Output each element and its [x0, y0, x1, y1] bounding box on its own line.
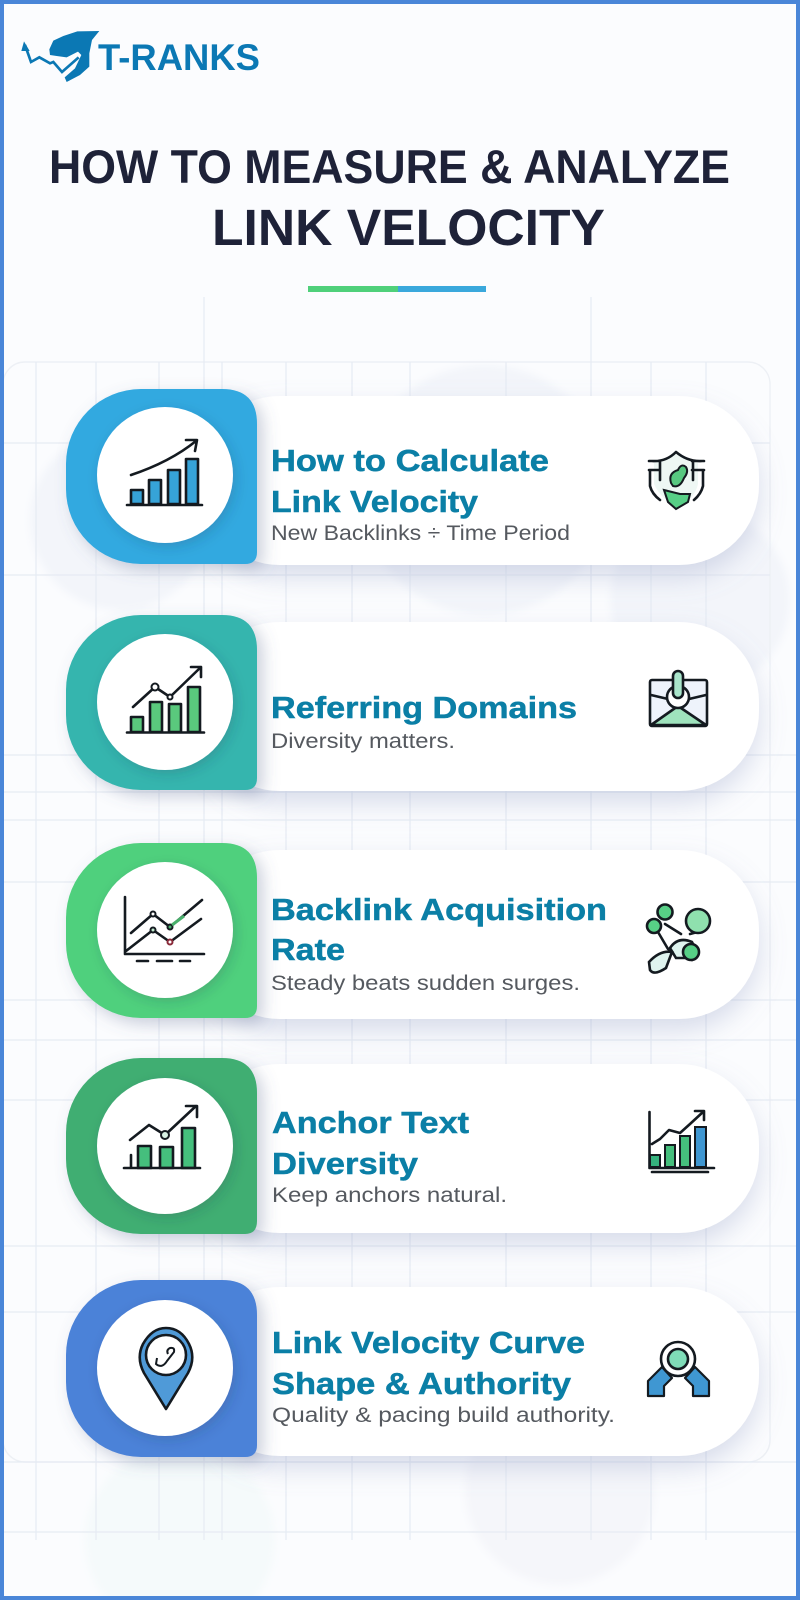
colour tile [66, 1280, 257, 1457]
icon: location pin [97, 1300, 233, 1436]
card [200, 622, 759, 791]
title: HOW TO MEASURE & ANALYZE [49, 140, 730, 193]
colour tile [66, 389, 257, 564]
icon: bars with arrow [97, 1078, 233, 1214]
panel: link velocity curve: Shape & Authority [272, 1366, 572, 1401]
icon: shield [649, 452, 704, 509]
logo wordmark: T-RANKS [98, 37, 260, 78]
title: LINK VELOCITY [212, 199, 605, 256]
panel: backlink acquisition rate: Rate [271, 932, 345, 967]
heading: How to Calculate [271, 443, 549, 478]
description: Keep anchors natural. [272, 1184, 507, 1207]
colour tile [66, 843, 257, 1018]
heading: Backlink Acquisition [271, 892, 607, 927]
icon: t-rex with zigzag arrow [21, 31, 99, 82]
panel: how to calculate: Link Velocity [271, 484, 479, 519]
icon: network molecule [647, 904, 710, 973]
description: New Backlinks ÷ Time Period [271, 522, 570, 545]
panel: link velocity curve [66, 1280, 759, 1457]
panel: how to calculate [66, 389, 759, 565]
panel: referring domains [66, 615, 759, 791]
description: Steady beats sudden surges. [271, 972, 580, 995]
description: Diversity matters. [271, 730, 455, 753]
card [200, 396, 759, 565]
icon: magnifier with arrows [648, 1342, 709, 1396]
card [200, 1287, 759, 1456]
card [200, 850, 759, 1019]
title underline [308, 286, 486, 292]
heading: Link Velocity Curve [272, 1325, 585, 1360]
heading: Referring Domains [271, 690, 577, 725]
icon: envelope pin [650, 671, 707, 726]
icon: growth chart [650, 1111, 714, 1172]
heading: Anchor Text [272, 1105, 469, 1140]
panel: anchor text diversity: Diversity [272, 1146, 419, 1181]
description: Quality & pacing build authority. [272, 1404, 615, 1427]
title [49, 140, 730, 256]
icon: line chart [97, 862, 233, 998]
card [200, 1064, 759, 1233]
colour tile [66, 615, 257, 790]
icon: bars with trend line [97, 634, 233, 770]
panel: backlink acquisition rate [66, 843, 759, 1019]
panel: anchor text diversity [66, 1058, 759, 1234]
colour tile [66, 1058, 257, 1234]
icon: rising bar chart [97, 407, 233, 543]
logo [21, 31, 260, 82]
